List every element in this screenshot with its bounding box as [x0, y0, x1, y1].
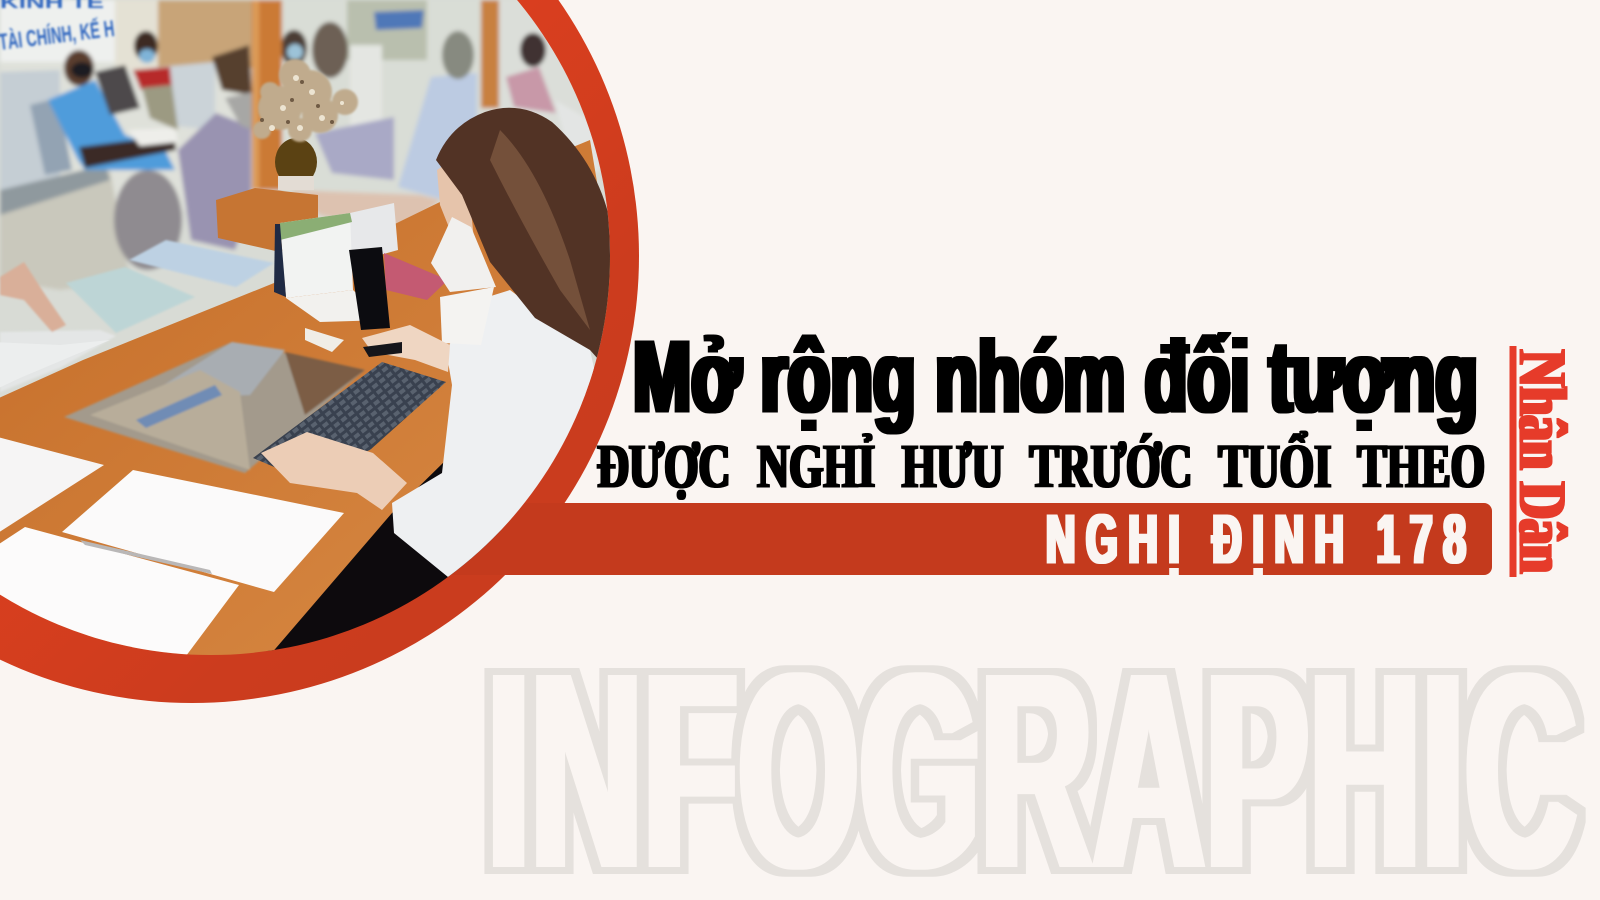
photo: smartphone: [349, 247, 390, 330]
photo: tent calendar: [274, 203, 398, 322]
photo: woman: [261, 108, 615, 577]
photo: mug: [440, 287, 494, 345]
red ring behind photo: [0, 0, 639, 703]
photo: face mask: [431, 217, 496, 292]
photo: wooden desk: [0, 140, 620, 655]
photo: dark space under desk: [268, 462, 501, 651]
photo: glass desk pad: [64, 342, 365, 473]
photo: white shirt: [392, 290, 600, 577]
logo: Nhân Dân vertical: Nhân Dân: [1505, 350, 1581, 573]
photo: mouse hand: [362, 325, 450, 372]
photo: keyboard: [253, 362, 446, 478]
photo: desk items left: [0, 240, 274, 392]
title line 3 on banner: NGHỊ ĐỊNH 178: [1046, 501, 1477, 579]
red banner bar: [440, 503, 1492, 575]
photo: mouse: [363, 342, 402, 357]
photo: papers on desk: [0, 340, 344, 660]
circular office photo: [0, 0, 620, 660]
photo: stapler: [305, 328, 344, 352]
photo: sign text on the back wall: [0, 0, 116, 55]
photo: keyboard hand: [261, 432, 407, 510]
photo: long hair: [436, 108, 615, 368]
photo: blurred background of the office: [0, 0, 620, 410]
photo: flower vase: [253, 59, 358, 190]
photo: face: [437, 167, 474, 233]
photo: desk phone: [384, 253, 448, 300]
photo: wooden post base: [216, 188, 318, 252]
photo: sign text on the back wall: TÀI CHÍNH, KẾ H: [0, 14, 116, 55]
